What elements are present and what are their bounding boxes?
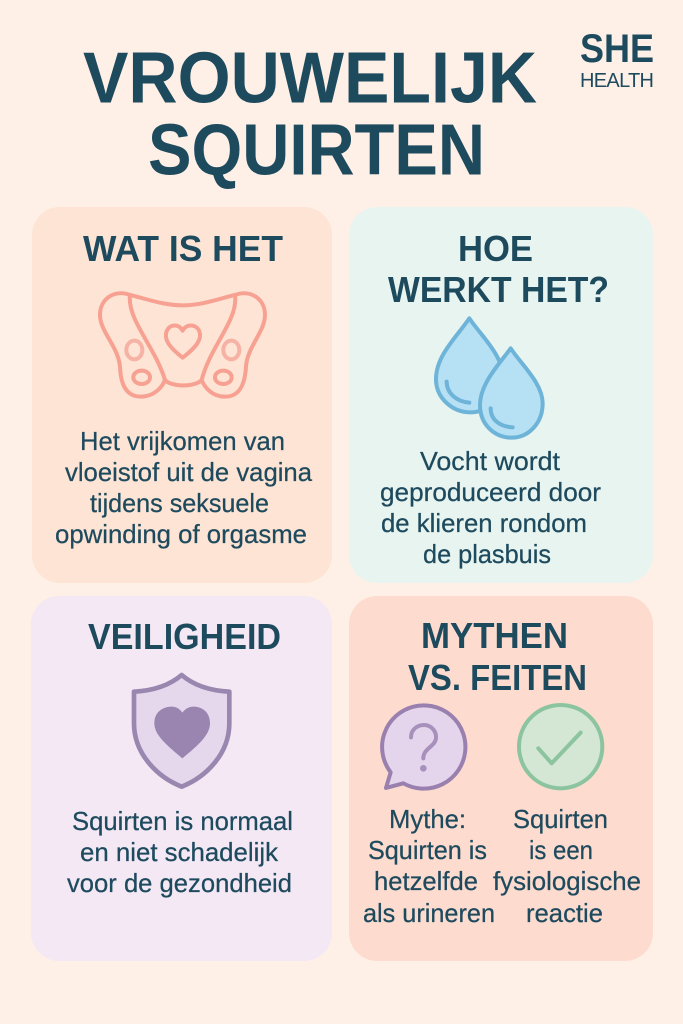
heading: hoe werkt het: HOE bbox=[458, 228, 533, 269]
text: fact: Squirten bbox=[513, 804, 608, 834]
icon: pelvis bbox=[100, 293, 265, 397]
panel: mythen vs. feiten bbox=[349, 596, 653, 961]
text: hoe werkt het: de klieren rondom bbox=[381, 508, 587, 538]
title bbox=[83, 38, 537, 190]
logo: SHE Health bbox=[580, 27, 654, 92]
heading: hoe werkt het bbox=[388, 228, 609, 310]
text: hoe werkt het: geproduceerd door bbox=[380, 477, 601, 507]
text: veiligheid: Squirten is normaal bbox=[72, 806, 293, 836]
text: myth: Squirten is bbox=[368, 835, 487, 865]
text: wat is het: opwinding of orgasme bbox=[55, 519, 307, 549]
icon: shield with heart bbox=[134, 675, 229, 787]
panel: wat is het bbox=[32, 207, 332, 583]
panel: hoe werkt het bbox=[349, 207, 653, 583]
heading: hoe werkt het: WERKT HET? bbox=[388, 269, 609, 310]
text: fact: is een bbox=[529, 835, 593, 865]
logo: SHE Health: HEALTH bbox=[580, 70, 654, 92]
panel: veiligheid bbox=[31, 596, 332, 961]
icon: check circle bbox=[519, 705, 602, 788]
text: wat is het: vloeistof uit de vagina bbox=[65, 457, 313, 487]
text: fact bbox=[493, 804, 641, 928]
title: VROUWELIJK bbox=[83, 38, 537, 118]
text: veiligheid: voor de gezondheid bbox=[67, 868, 292, 898]
text: wat is het bbox=[55, 426, 313, 549]
title: SQUIRTEN bbox=[148, 110, 485, 190]
heading: wat is het: WAT IS HET bbox=[83, 228, 283, 269]
text: fact: reactie bbox=[526, 898, 603, 928]
text: veiligheid bbox=[67, 806, 293, 898]
text: myth: als urineren bbox=[363, 898, 495, 928]
text: veiligheid: en niet schadelijk bbox=[80, 837, 279, 867]
text: hoe werkt het bbox=[380, 446, 601, 569]
text: hoe werkt het: de plasbuis bbox=[423, 539, 551, 569]
icon: water drops bbox=[436, 318, 543, 438]
text: myth: Mythe: bbox=[389, 804, 466, 834]
icon: question bubble bbox=[382, 705, 465, 789]
text: wat is het: tijdens seksuele bbox=[90, 488, 269, 518]
logo: SHE Health: SHE bbox=[580, 27, 654, 71]
text: fact: fysiologische bbox=[493, 866, 641, 896]
heading: veiligheid: VEILIGHEID bbox=[88, 616, 281, 657]
text: myth: hetzelfde bbox=[374, 866, 478, 896]
text: myth bbox=[363, 804, 495, 928]
heading: mythen vs. feiten: VS. FEITEN bbox=[408, 657, 587, 698]
text: hoe werkt het: Vocht wordt bbox=[420, 446, 561, 476]
heading: mythen vs. feiten bbox=[408, 615, 587, 698]
text: wat is het: Het vrijkomen van bbox=[80, 426, 285, 456]
heading: mythen vs. feiten: MYTHEN bbox=[421, 615, 568, 656]
